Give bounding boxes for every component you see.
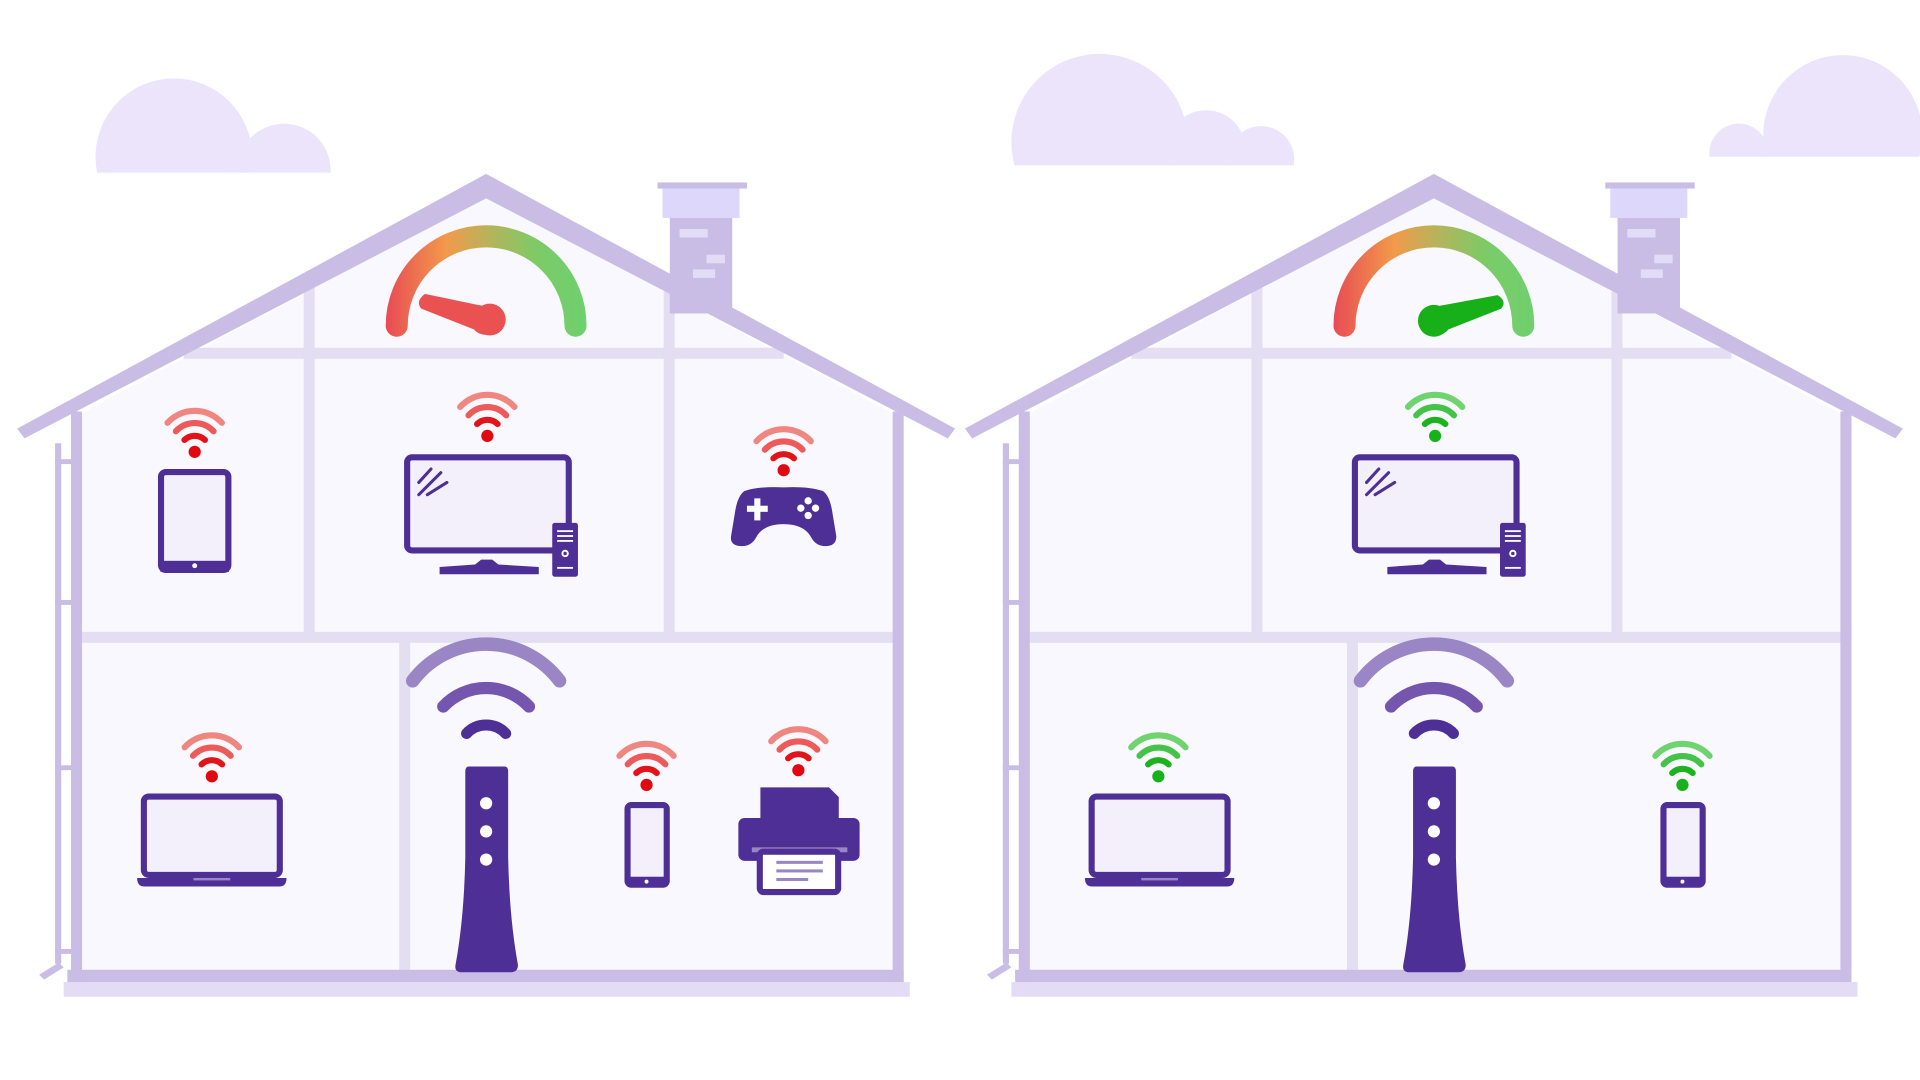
house: right (good wifi)	[965, 174, 1903, 997]
tv wifi	[1408, 395, 1462, 442]
gamepad	[731, 429, 836, 546]
tablet	[160, 411, 229, 572]
phone	[619, 744, 674, 887]
printer	[738, 729, 860, 892]
gauge: slow	[397, 236, 576, 336]
laptop wifi	[1131, 735, 1186, 782]
phone	[1655, 744, 1710, 887]
house: left (poor wifi)	[17, 174, 955, 997]
gauge: fast	[1344, 236, 1523, 337]
laptop wifi	[185, 735, 239, 782]
clouds	[96, 54, 1920, 173]
tv wifi	[460, 395, 515, 442]
